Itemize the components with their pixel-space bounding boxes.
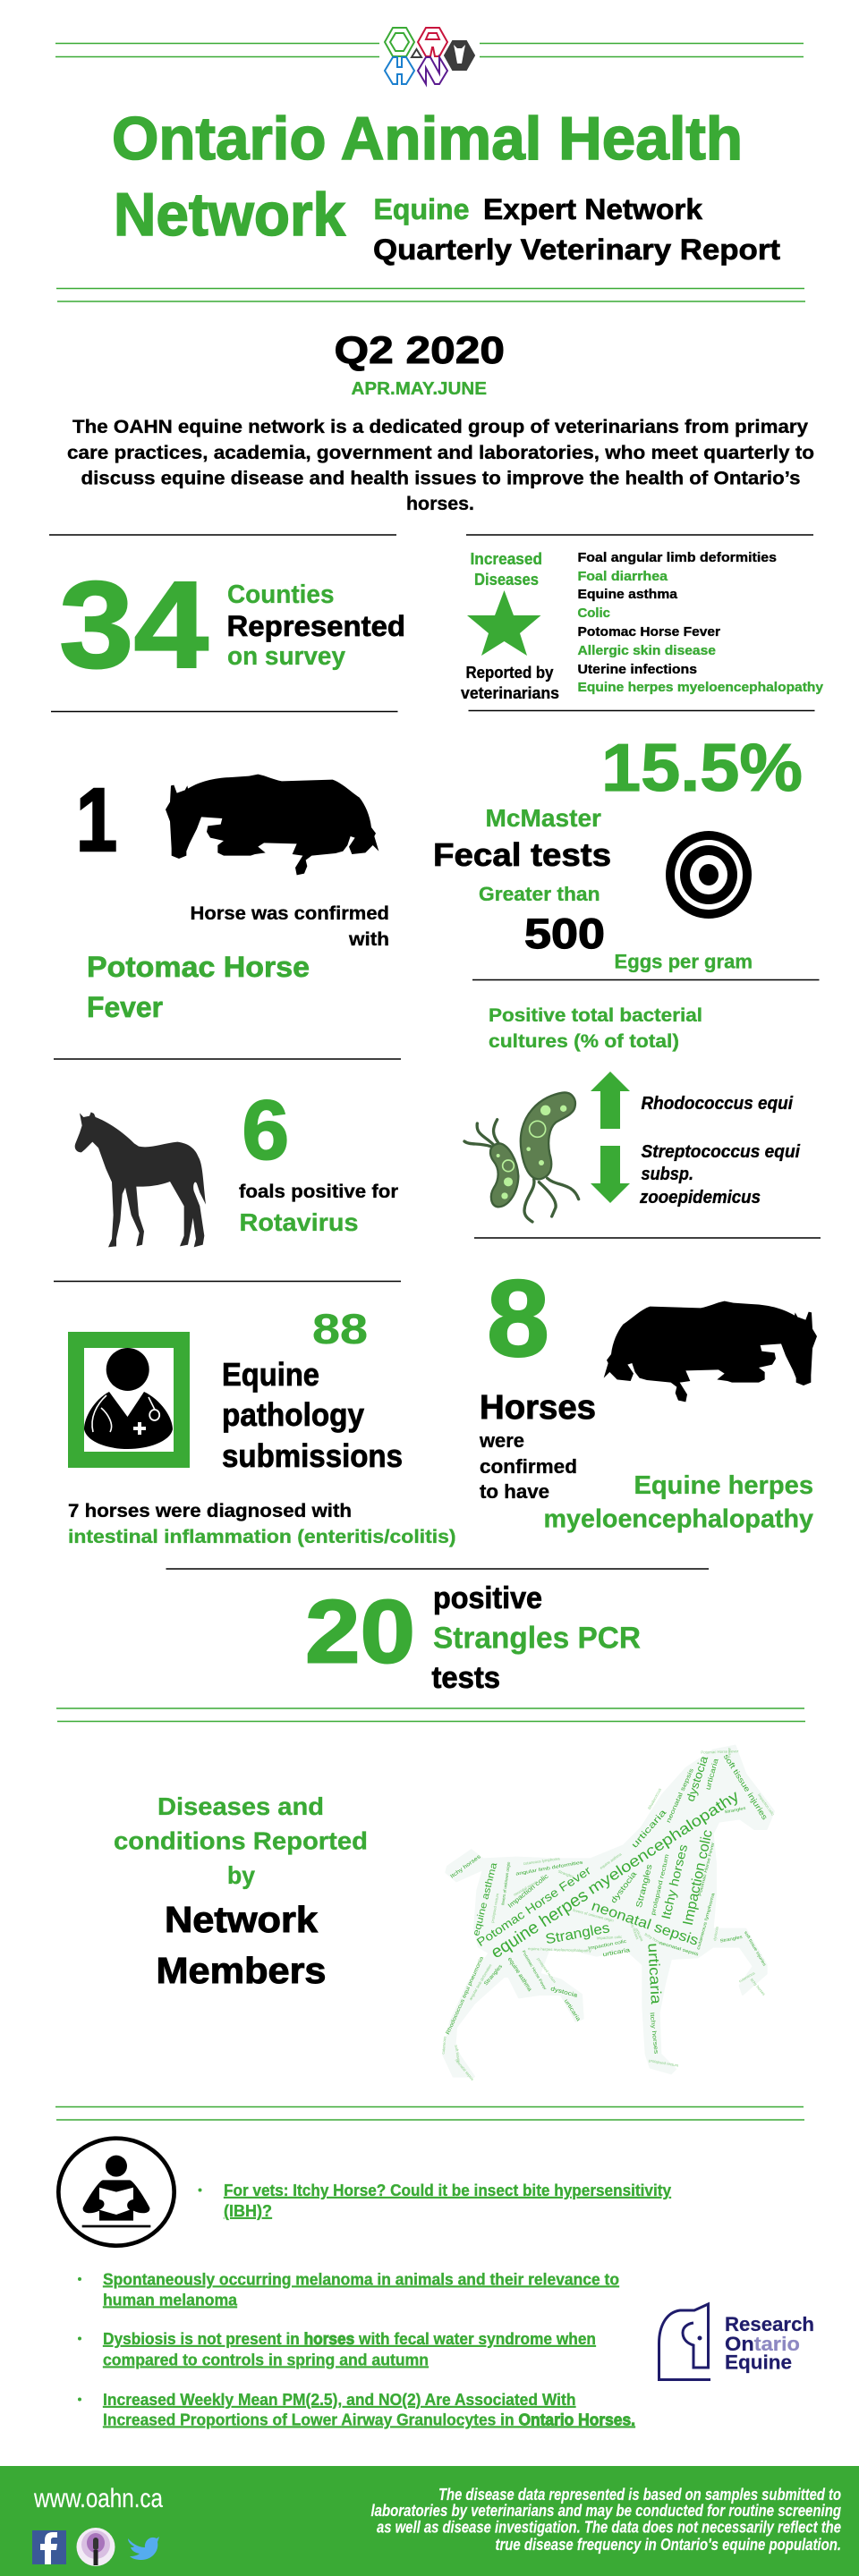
panel: pathology submissions: Equine [222, 1356, 319, 1393]
panel: bacterial cultures: Positive total bacterial [489, 1005, 702, 1026]
heading: diseases reported: conditions Reported [114, 1826, 368, 1855]
chart: horse-shaped word cloud: neonatal sepsis [590, 1899, 701, 1949]
stat: 34 counties: Counties [227, 580, 335, 609]
panel: bacterial cultures: cultures (% of total) [489, 1031, 679, 1052]
chart: horse-shaped word cloud: soft tissue [454, 2045, 462, 2063]
chart: horse-shaped word cloud: angular limb deformities [515, 1860, 583, 1877]
intro paragraph: The OAHN equine network is a dedicated group of veterinarians from primary [72, 417, 808, 437]
panel: pathology submissions: submissions [222, 1437, 403, 1474]
chart: horse-shaped word cloud: Rhodococcus equi pneumonia [446, 1955, 485, 2036]
link: melanoma: Spontaneously occurring melanoma in animals and their relevance to [103, 2270, 619, 2288]
quarter heading [335, 329, 505, 399]
panel: equine herpes myeloencephalopathy [479, 1258, 817, 1533]
link: dysbiosis: compared to controls in spring and autumn [103, 2351, 429, 2368]
chart: horse-shaped word cloud: dystocia [549, 1986, 578, 1999]
panel: equine herpes myeloencephalopathy: Horses [480, 1389, 596, 1427]
link: insect bite hypersensitivity: (IBH)? [224, 2202, 272, 2220]
logo hexagon: N [418, 57, 447, 84]
stat: 34 counties [59, 556, 405, 694]
panel: increased diseases: veterinarians [461, 684, 559, 702]
chart: horse-shaped word cloud: Strangles [719, 1935, 744, 1945]
icon: down arrow [591, 1146, 630, 1203]
chart: horse-shaped word cloud: Itchy horses [450, 1854, 482, 1880]
disclaimer [370, 2486, 841, 2554]
list: increased diseases: Allergic skin disease [578, 643, 716, 658]
stat: 34 counties: Represented [227, 610, 405, 642]
chart: horse-shaped word cloud: cutaneous [738, 1970, 755, 1984]
list: increased diseases: Foal diarrhea [578, 569, 668, 584]
chart: horse-shaped word cloud: Impaction colic [588, 1939, 627, 1952]
chart: horse-shaped word cloud: Strangles [483, 1964, 504, 1987]
title [112, 105, 743, 249]
footer band: www.oahn.ca [33, 2484, 163, 2513]
heading: diseases reported: Members [156, 1950, 326, 1991]
chart: horse-shaped word cloud: Strangles [634, 1863, 654, 1909]
icon: star [467, 590, 540, 656]
quarter heading: APR.MAY.JUNE [351, 379, 487, 399]
chart: horse-shaped word cloud: Fever [727, 1747, 732, 1758]
chart: horse-shaped word cloud: urticaria [634, 1928, 644, 1943]
chart: horse-shaped word cloud: neonatal sepsis [659, 1941, 700, 1958]
title: Network [114, 181, 345, 249]
panel: pathology submissions: intestinal inflammation (enteritis/colitis) [68, 1527, 456, 1547]
icon: bacteria [464, 1092, 579, 1222]
chart: horse-shaped word cloud: Potomac Horse Fever [474, 1863, 594, 1949]
chart: horse-shaped word cloud [441, 1746, 776, 2081]
panel: fecal tests: Fecal tests [433, 836, 611, 873]
link: air quality: Increased Weekly Mean PM(2.5), and NO(2) Are Associated With [103, 2391, 576, 2409]
chart: horse-shaped word cloud: equine asthma [599, 1852, 623, 1870]
subtitle: Equine [374, 193, 469, 225]
chart: horse-shaped word cloud: prolapsed rectum [536, 1957, 557, 1984]
chart: horse-shaped word cloud: urticaria [630, 1808, 669, 1851]
heading: diseases reported: Diseases and [157, 1792, 324, 1820]
panel: fecal tests: 15.5% [601, 730, 803, 805]
chart: horse-shaped word cloud: neonatal sepsis [513, 1879, 539, 1897]
chart: horse-shaped word cloud: Strangles [544, 1920, 611, 1947]
logo: Research Ontario Equine: Ontario [725, 2333, 800, 2355]
panel: increased diseases [461, 550, 559, 702]
chart: horse-shaped word cloud: Potomac Horse Fever [521, 1950, 548, 1991]
chart: horse-shaped word cloud: fevers of unknown origin [500, 1861, 511, 1905]
subtitle: Quarterly Veterinary Report [373, 233, 780, 266]
intro paragraph: care practices, academia, government and laboratories, who meet quarterly to [67, 443, 814, 463]
icon: veterinarian in green frame [68, 1332, 190, 1468]
footer band [0, 2466, 859, 2576]
icon: lying horse silhouette mirrored [604, 1301, 817, 1402]
panel: bacterial cultures: Streptococcus equi [641, 1142, 800, 1162]
link: melanoma [78, 2270, 619, 2309]
chart: horse-shaped word cloud: cutaneous [441, 2036, 447, 2055]
list: increased diseases: Foal angular limb deformities [578, 550, 777, 565]
panel: pathology submissions: 88 [312, 1305, 368, 1352]
chart: horse-shaped word cloud: cutaneous lymphoma [696, 1893, 717, 1951]
panel: rotavirus foals: 6 [242, 1082, 289, 1177]
list: increased diseases: Potomac Horse Fever [578, 624, 720, 640]
chart: horse-shaped word cloud: cutaneous lymphoma [523, 1856, 560, 1866]
chart: horse-shaped word cloud: urticaria [704, 1757, 720, 1791]
chart: horse-shaped word cloud: equine asthma [506, 1956, 532, 1993]
panel: equine herpes myeloencephalopathy: to have [480, 1480, 549, 1503]
stat: 34 counties: 34 [59, 556, 208, 694]
stat: 20 strangles: 20 [305, 1581, 415, 1682]
chart: horse-shaped word cloud: myeloencephalopathy [584, 1786, 743, 1898]
heading: diseases reported [114, 1792, 368, 1991]
chart: horse-shaped word cloud: Itchy horses [659, 1843, 690, 1920]
panel: increased diseases: Diseases [474, 571, 539, 589]
stat: 20 strangles: positive [433, 1581, 542, 1615]
logo: Research Ontario Equine: Equine [725, 2351, 792, 2374]
panel: fecal tests [433, 730, 803, 973]
logo hexagon: A [418, 28, 447, 56]
chart: horse-shaped word cloud: Itchy horses [649, 2012, 659, 2055]
panel: Potomac Horse Fever: with [348, 929, 389, 950]
link: melanoma: human melanoma [103, 2292, 238, 2309]
chart: horse-shaped word cloud: dystocia [608, 1869, 638, 1905]
panel: increased diseases: Increased [471, 550, 542, 568]
panel: equine herpes myeloencephalopathy: 8 [487, 1258, 549, 1379]
chart: horse-shaped word cloud: Potomac Horse Fever [701, 1749, 739, 1755]
intro paragraph [67, 417, 814, 514]
logo: Research Ontario Equine [658, 2304, 814, 2381]
logo: Research Ontario Equine: Research [725, 2313, 814, 2335]
list: increased diseases: Equine herpes myeloencephalopathy [578, 680, 824, 695]
panel: equine herpes myeloencephalopathy: confirmed [480, 1455, 577, 1478]
chart: horse-shaped word cloud: Strangles [557, 1869, 574, 1879]
panel: bacterial cultures: zooepidemicus [639, 1188, 761, 1208]
panel: fecal tests: Greater than [479, 883, 600, 905]
subtitle [373, 193, 780, 266]
intro paragraph: horses. [406, 494, 474, 514]
list: increased diseases [578, 550, 824, 695]
chart: horse-shaped word cloud: urticaria [644, 1943, 665, 2005]
icon: twitter [128, 2537, 159, 2560]
logo: OAHN hexagons [385, 28, 474, 84]
chart: horse-shaped word cloud: equine herpes myeloencephalopathy [528, 1946, 592, 1953]
chart: horse-shaped word cloud: Impaction colic [596, 1935, 623, 1940]
panel: pathology submissions: pathology [222, 1396, 364, 1433]
chart: horse-shaped word cloud: angular limb deformities [468, 1963, 493, 2001]
quarter heading: Q2 2020 [335, 329, 505, 372]
chart: horse-shaped word cloud: prolapsed rectum [651, 1853, 670, 1916]
list: increased diseases: Colic [578, 606, 610, 621]
panel: pathology submissions: 7 horses were diagnosed with [68, 1501, 352, 1521]
chart: horse-shaped word cloud: equine asthma [471, 1861, 499, 1937]
panel: increased diseases: Reported by [465, 664, 553, 682]
link: air quality: Increased Proportions of Lower Airway Granulocytes in Ontario Horses. [103, 2411, 635, 2429]
chart: horse-shaped word cloud: Itchy horses [643, 1932, 664, 1946]
link: dysbiosis: Dysbiosis is not present in horses with fecal water syndrome when [103, 2330, 596, 2348]
chart: horse-shaped word cloud: equine herpes [488, 1886, 591, 1962]
chart: horse-shaped word cloud: Impaction colic [757, 1792, 776, 1817]
chart: horse-shaped word cloud: neonatal sepsis [666, 1767, 695, 1824]
panel: bacterial cultures: Rhodococcus equi [641, 1094, 793, 1114]
icon: up arrow [591, 1072, 630, 1129]
panel: pathology submissions [68, 1305, 456, 1547]
chart: horse-shaped word cloud: prolapsed rectum [649, 2058, 679, 2068]
link: air quality [78, 2391, 635, 2429]
panel: equine herpes myeloencephalopathy: were [479, 1429, 524, 1452]
logo triangle [412, 49, 421, 57]
chart: horse-shaped word cloud: dystocia [712, 1926, 719, 1941]
panel: equine herpes myeloencephalopathy: myeloencephalopathy [544, 1504, 813, 1533]
panel: bacterial cultures [464, 1005, 800, 1222]
chart: horse-shaped word cloud: soft tissue injuries [722, 1752, 770, 1822]
list: increased diseases: Uterine infections [578, 662, 697, 677]
panel: rotavirus foals: Rotavirus [240, 1208, 358, 1236]
panel: Potomac Horse Fever [76, 770, 389, 1023]
chart: horse-shaped word cloud: soft tissue injuries [744, 1930, 768, 1967]
chart: horse-shaped word cloud: Potomac Horse Fever [697, 1842, 715, 1896]
panel: fecal tests: Eggs per gram [614, 950, 753, 973]
chart: horse-shaped word cloud: Impaction colic [681, 1828, 716, 1927]
subtitle: Expert Network [483, 193, 702, 225]
chart: horse-shaped word cloud: Itchy horses [750, 1978, 766, 1996]
chart: horse-shaped word cloud: dystocia [685, 1753, 710, 1803]
stat: 34 counties: on survey [227, 642, 345, 671]
panel: Potomac Horse Fever: Potomac Horse [87, 951, 310, 983]
icon: lying horse silhouette [166, 775, 378, 875]
stat: 20 strangles: Strangles PCR [433, 1621, 641, 1655]
links: further reading [78, 2182, 671, 2429]
chart: horse-shaped word cloud: prolapsed rectum [490, 1893, 500, 1923]
panel: bacterial cultures: subsp. [641, 1165, 693, 1184]
chart: horse-shaped word cloud: Rhodococcus [647, 1787, 662, 1810]
panel: rotavirus foals [75, 1082, 398, 1247]
panel: equine herpes myeloencephalopathy: Equine herpes [634, 1471, 813, 1500]
intro paragraph: discuss equine disease and health issues to improve the health of Ontario’s [81, 469, 800, 488]
logo hexagon: O [385, 28, 414, 56]
icon: facebook [32, 2530, 66, 2564]
icon: person reading [58, 2139, 174, 2246]
chart: horse-shaped word cloud: urticaria [563, 1998, 582, 2023]
panel: Potomac Horse Fever: 1 [76, 770, 117, 870]
heading: diseases reported: by [227, 1861, 255, 1889]
icon: podcast [77, 2528, 115, 2566]
list: increased diseases: Equine asthma [578, 587, 678, 602]
panel: rotavirus foals: foals positive for [239, 1182, 398, 1202]
chart: horse-shaped word cloud: Impaction colic [506, 1872, 550, 1910]
panel: fecal tests: 500 [524, 910, 605, 957]
logo hexagon: H [385, 57, 414, 84]
icon: target [666, 831, 752, 919]
link: dysbiosis [78, 2330, 596, 2368]
panel: Potomac Horse Fever: Horse was confirmed [190, 903, 389, 924]
icon: foal [75, 1112, 206, 1247]
chart: horse-shaped word cloud: fevers of unknown origin [573, 1908, 615, 1923]
panel: Potomac Horse Fever: Fever [87, 991, 163, 1023]
chart: horse-shaped word cloud: Itchy horses [628, 1919, 640, 1940]
chart: horse-shaped word cloud: Strangles [724, 1806, 747, 1814]
heading: diseases reported: Network [165, 1899, 318, 1940]
chart: horse-shaped word cloud: neonatal sepsis [455, 2058, 475, 2081]
panel: fecal tests: McMaster [485, 804, 601, 832]
chart: horse-shaped word cloud: urticaria [602, 1947, 631, 1958]
logo hexagon: horse head [445, 41, 474, 70]
link: insect bite hypersensitivity: For vets: Itchy Horse? Could it be insect bite hypersensitivity [224, 2182, 671, 2199]
header rules beside logo [55, 43, 804, 57]
title: Ontario Animal Health [112, 105, 743, 173]
stat: 20 strangles: tests [431, 1661, 500, 1695]
link: insect bite hypersensitivity [199, 2182, 671, 2220]
stat: 20 strangles [305, 1581, 641, 1695]
